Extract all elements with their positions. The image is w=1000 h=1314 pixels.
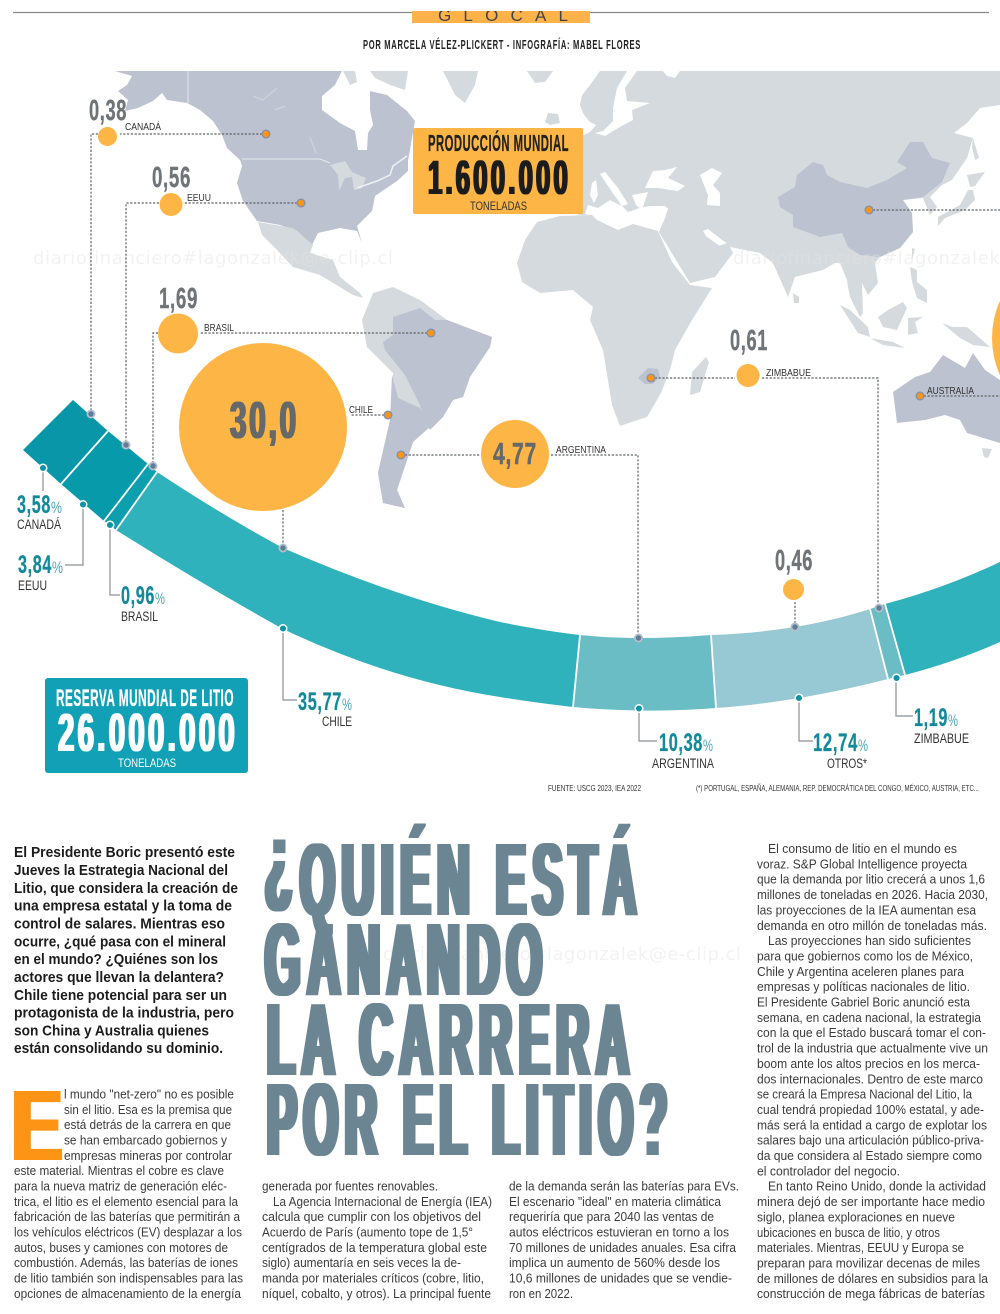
body column 3: autos eléctricos estuvieran en torno a los bbox=[509, 1226, 729, 1240]
lead paragraph: El Presidente Boric presentó este bbox=[14, 845, 235, 861]
reserve: Brasil: % bbox=[155, 589, 165, 608]
body column 2: calcula que cumplir con los objetivos del bbox=[262, 1210, 481, 1224]
band lower markers bbox=[39, 464, 900, 712]
lead paragraph: protagonista de la industria, pero bbox=[14, 1006, 234, 1022]
body column 1: l mundo "net-zero" no es posible bbox=[64, 1088, 234, 1102]
reserve: Argentina: % bbox=[703, 736, 713, 755]
reserve: EEUU bbox=[18, 551, 63, 593]
body column 3: de la demanda serán las baterías para EVs. bbox=[509, 1180, 739, 1194]
body column 3: El escenario "ideal" en materia climática bbox=[509, 1195, 721, 1209]
segment: Canadá bbox=[23, 400, 108, 484]
reserve: Chile: CHILE bbox=[322, 714, 352, 729]
bubble: Otros 0,46: 0,46 bbox=[775, 545, 813, 577]
watermarks bbox=[33, 248, 1000, 965]
bubble: Zimbabue 0,61: 0,61 bbox=[730, 325, 768, 357]
body column 1: está detrás de la carrera en que bbox=[64, 1118, 231, 1132]
segment: Argentina bbox=[573, 635, 716, 711]
body column 4: materiales. Mientras, EEUU y Europa se bbox=[757, 1241, 964, 1255]
reserve: Otros bbox=[813, 729, 868, 771]
body column 4: millones de toneladas en 2026. Hacia 2030, bbox=[757, 888, 988, 902]
bubble: Chile 30,0 bbox=[179, 343, 373, 511]
body column 4: las proyecciones de la IEA aumentan esa bbox=[757, 903, 976, 917]
body column 1: opciones de almacenamiento de la energía bbox=[14, 1287, 241, 1301]
body column 4: que la demanda por litio crecerá a unos 1,6 bbox=[757, 873, 985, 887]
reserve: Argentina: 10,38 bbox=[659, 729, 703, 757]
reserve: Zimbabue bbox=[914, 704, 969, 746]
body column 4: boom ante los altos precios en los merca- bbox=[757, 1057, 980, 1071]
body column 2: níquel, cobalto, y otros). La principal fuente bbox=[262, 1287, 491, 1301]
body column 4: demanda en otro millón de toneladas más. bbox=[757, 919, 987, 933]
body column 4: El Presidente Gabriel Boric anunció esta bbox=[757, 996, 970, 1010]
map: South America bbox=[362, 287, 492, 508]
band upper markers bbox=[87, 410, 883, 642]
map: Eurasia bbox=[578, 71, 1000, 317]
reserve: Canadá bbox=[17, 491, 62, 532]
reserve: Otros: % bbox=[858, 736, 868, 755]
map: Australia bbox=[893, 353, 1000, 443]
reserve: Argentina bbox=[652, 729, 714, 771]
reserve: Chile bbox=[298, 688, 352, 729]
map: Africa bbox=[517, 215, 712, 426]
map: Brazil bbox=[383, 308, 492, 430]
lead paragraph: están consolidando su dominio. bbox=[14, 1041, 223, 1057]
body column 1: sin el litio. Esa es la premisa que bbox=[64, 1103, 232, 1117]
body column 4: minera dejó de ser importante hace medio bbox=[757, 1195, 985, 1209]
bubble: EEUU 0,56: EEUU bbox=[187, 192, 211, 204]
lead paragraph: control de salares. Mientras eso bbox=[14, 916, 225, 932]
map: Zimbabwe bbox=[638, 368, 660, 384]
callout: producción mundial: TONELADAS bbox=[470, 199, 527, 213]
reserve: Canadá: % bbox=[51, 498, 62, 517]
callout: reserva mundial de litio: RESERVA MUNDIAL DE LITIO bbox=[56, 685, 234, 712]
body column 2 bbox=[262, 1180, 492, 1301]
bubble: Zimbabue 0,61: ZIMBABUE bbox=[766, 367, 811, 379]
body column 2: La Agencia Internacional de Energía (IEA) bbox=[273, 1195, 492, 1209]
reserve: Canadá: 3,58 bbox=[17, 491, 51, 519]
callout: reserva mundial de litio bbox=[45, 678, 248, 773]
body column 1: los vehículos eléctricos (EV) desplazar a los bbox=[14, 1226, 242, 1240]
map: Great Lakes bbox=[330, 161, 366, 190]
reserve: Brasil: 0,96 bbox=[121, 582, 155, 610]
body column 4: se creará la Empresa Nacional del Litio, la bbox=[757, 1088, 972, 1102]
map: Mexico and Central America bbox=[258, 222, 363, 298]
body column 4: voraz. S&P Global Intelligence proyecta bbox=[757, 857, 967, 871]
lead paragraph: en el mundo? ¿Quiénes son los bbox=[14, 952, 218, 968]
segment: EEUU bbox=[61, 431, 148, 521]
map: North America bbox=[115, 71, 415, 245]
lead paragraph: ocurre, ¿qué pasa con el mineral bbox=[14, 934, 226, 950]
body column 4: ubicaciones en busca de litio, y otros bbox=[757, 1226, 940, 1240]
body column 4: con la que el Estado buscará tomar el con- bbox=[757, 1026, 986, 1040]
segment: Otros bbox=[711, 609, 888, 708]
body column 4: En tanto Reino Unido, donde la actividad bbox=[768, 1180, 986, 1194]
reserve: Brasil bbox=[121, 582, 165, 624]
drop cap: E bbox=[12, 1070, 62, 1182]
reserve: EEUU: % bbox=[52, 558, 63, 577]
reserve: EEUU: EEUU bbox=[18, 578, 47, 593]
reserve: Brasil: BRASIL bbox=[121, 609, 158, 624]
bubble: Chile 30,0: CHILE bbox=[349, 404, 373, 416]
map: Arabia bbox=[664, 232, 730, 281]
bubble: Brasil 1,69: 1,69 bbox=[159, 283, 198, 315]
reserve: Otros: OTROS* bbox=[827, 756, 868, 771]
lead paragraph: Litio, que considera la creación de bbox=[14, 881, 238, 897]
body column 3: 70 millones de unidades anuales. Esa cifra bbox=[509, 1241, 736, 1255]
callout: producción mundial: PRODUCCIÓN MUNDIAL bbox=[428, 129, 569, 156]
callout: reserva mundial de litio: 26.000.000 bbox=[58, 703, 238, 763]
body column 1: este material. Mientras el cobre es clave bbox=[14, 1164, 224, 1178]
main headline: GANANDO bbox=[265, 902, 549, 1017]
body column 4: dos internacionales. Dentro de este marco bbox=[757, 1072, 983, 1086]
body column 4: para que gobiernos como los de México, bbox=[757, 950, 973, 964]
callout: reserva mundial de litio: TONELADAS bbox=[118, 756, 176, 770]
body column 4: Las proyecciones han sido suficientes bbox=[768, 934, 971, 948]
body column 4: da que considera al Estado siempre como bbox=[757, 1149, 982, 1163]
reserve: Canadá: CANADÁ bbox=[17, 517, 61, 532]
body column 1: para la nueva matriz de generación eléc- bbox=[14, 1180, 227, 1194]
segment: Brasil bbox=[104, 464, 157, 530]
section tab: Glocal: GLOCAL bbox=[438, 6, 568, 25]
segment: Australia and China bbox=[885, 562, 1000, 675]
body column 4: de millones de dólares en subsidios para la bbox=[757, 1272, 988, 1286]
watermarks: diariofinanciero#lagonzalek@e-clip.cl bbox=[33, 248, 393, 269]
segment: Zimbabue bbox=[870, 604, 905, 679]
body column 1: fabricación de las baterías que permitirán a bbox=[14, 1210, 240, 1224]
reserves arc band bbox=[23, 400, 1000, 711]
lead paragraph: Jueves la Estrategia Nacional del bbox=[14, 863, 228, 879]
bubble: Australia: AUSTRALIA bbox=[927, 385, 974, 397]
segment: Chile bbox=[116, 472, 580, 707]
body column 2: centígrados de la temperatura global este bbox=[262, 1241, 487, 1255]
bubble: Argentina 4,77: ARGENTINA bbox=[556, 444, 606, 456]
body column 4: Chile y Argentina aceleren planes para bbox=[757, 965, 964, 979]
body column 4: preparan para movilizar decenas de miles bbox=[757, 1256, 980, 1270]
body column 4: semana, en cadena nacional, la estrategia bbox=[757, 1011, 981, 1025]
reserve: Argentina: ARGENTINA bbox=[652, 756, 714, 771]
body column 4 bbox=[757, 842, 988, 1301]
body column 4: empresas y políticas nacionales de litio. bbox=[757, 980, 970, 994]
bubble: Otros 0,46 bbox=[775, 545, 813, 600]
body column 4: cual tendrá propiedad 100% estatal, y ade- bbox=[757, 1103, 984, 1117]
bubble: Chile 30,0: 30,0 bbox=[230, 392, 299, 450]
body column 1: empresas mineras por controlar bbox=[64, 1149, 232, 1163]
body column 3: requeriría que para 2040 las ventas de bbox=[509, 1210, 714, 1224]
body column 4: más será la entidad a cargo de explotar los bbox=[757, 1118, 987, 1132]
lead paragraph: Chile tiene potencial para ser un bbox=[14, 988, 227, 1004]
source note: FUENTE: USCG 2023, IEA 2022 bbox=[548, 783, 641, 793]
body column 1: de litio también son indispensables para las bbox=[14, 1272, 243, 1286]
body column 4: construcción de mega fábricas de baterías bbox=[757, 1287, 985, 1301]
reserve: Zimbabue: 1,19 bbox=[914, 704, 948, 732]
map location markers bbox=[262, 130, 924, 459]
bubble: Canadá 0,38: 0,38 bbox=[89, 95, 127, 127]
callout: producción mundial bbox=[413, 128, 583, 214]
bubble: Zimbabue 0,61 bbox=[730, 325, 811, 387]
main headline bbox=[265, 801, 674, 1177]
body column 2: manda por materiales críticos (cobre, litio, bbox=[262, 1272, 484, 1286]
map: Arctic Canada bbox=[343, 71, 408, 90]
lead paragraph bbox=[14, 845, 238, 1057]
map: seas bbox=[585, 71, 727, 247]
reserve: Zimbabue: ZIMBABUE bbox=[914, 731, 969, 746]
map: China bbox=[778, 142, 950, 257]
section tab: Glocal bbox=[412, 11, 590, 23]
body column 2: Acuerdo de París (aumento tope de 1,5° bbox=[262, 1226, 473, 1240]
bubble: Brasil 1,69 bbox=[158, 283, 234, 354]
body column 1: combustión. Además, las baterías de iones bbox=[14, 1256, 238, 1270]
lead paragraph: son China y Australia quienes bbox=[14, 1024, 209, 1040]
byline: POR MARCELA VÉLEZ-PLICKERT - INFOGRAFÍA: MABEL FLORES bbox=[363, 37, 641, 52]
bubble: Australia bbox=[927, 248, 1000, 428]
body column 3: 10,6 millones de unidades que se vendie- bbox=[509, 1272, 732, 1286]
bubble: Argentina 4,77 bbox=[481, 420, 606, 488]
watermarks: diariofinanciero#lagonzalek@e-clip.cl bbox=[383, 944, 741, 965]
map: islands bbox=[443, 71, 992, 458]
lead paragraph: actores que llevan la delantera? bbox=[14, 970, 224, 986]
reserve: Chile: % bbox=[342, 695, 352, 714]
map: Chile and Argentina bbox=[378, 375, 432, 508]
callout: producción mundial: 1.600.000 bbox=[428, 152, 571, 205]
bubble: Brasil 1,69: BRASIL bbox=[204, 322, 234, 334]
body column 3 bbox=[509, 1180, 739, 1301]
bubble: EEUU 0,56: 0,56 bbox=[152, 162, 191, 194]
reserve labels bbox=[17, 491, 969, 771]
body column 1: trica, el litio es el elemento esencial para la bbox=[14, 1195, 238, 1209]
body column 4: trol de la industria que actualmente vive un bbox=[757, 1042, 988, 1056]
world map bbox=[115, 71, 1000, 508]
body column 4: el controlador del negocio. bbox=[757, 1164, 900, 1178]
bubble: Canadá 0,38: CANADÁ bbox=[125, 120, 161, 133]
bubble: Canadá 0,38 bbox=[89, 95, 161, 146]
body column 1: autos, buses y camiones con motores de bbox=[14, 1241, 228, 1255]
main headline: ¿ bbox=[265, 801, 292, 916]
reserve: Zimbabue: % bbox=[948, 711, 958, 730]
body column 2: siglo) aumentaría en seis veces la de- bbox=[262, 1256, 461, 1270]
bubble: EEUU 0,56 bbox=[152, 162, 211, 216]
connector lines bbox=[43, 134, 1000, 741]
reserve: Chile: 35,77 bbox=[298, 688, 342, 716]
body column 3: ron en 2022. bbox=[509, 1287, 573, 1301]
body column 1: se han embarcado gobiernos y bbox=[64, 1134, 228, 1148]
reserve: EEUU: 3,84 bbox=[18, 551, 52, 579]
body column 4: siglo, planea exploraciones en nueve bbox=[757, 1210, 955, 1224]
reserve: Otros: 12,74 bbox=[813, 729, 858, 757]
lead paragraph: una empresa estatal y la toma de bbox=[14, 898, 232, 914]
body column 4: El consumo de litio en el mundo es bbox=[768, 842, 957, 856]
body column 2: generada por fuentes renovables. bbox=[262, 1180, 438, 1194]
body column 1 bbox=[14, 1088, 243, 1301]
bubble: Argentina 4,77: 4,77 bbox=[493, 436, 537, 471]
production bubbles bbox=[89, 95, 1000, 600]
body column 4: salares bajo una articulación público-priva- bbox=[757, 1134, 984, 1148]
body column 3: implica un aumento de 560% desde los bbox=[509, 1256, 720, 1270]
